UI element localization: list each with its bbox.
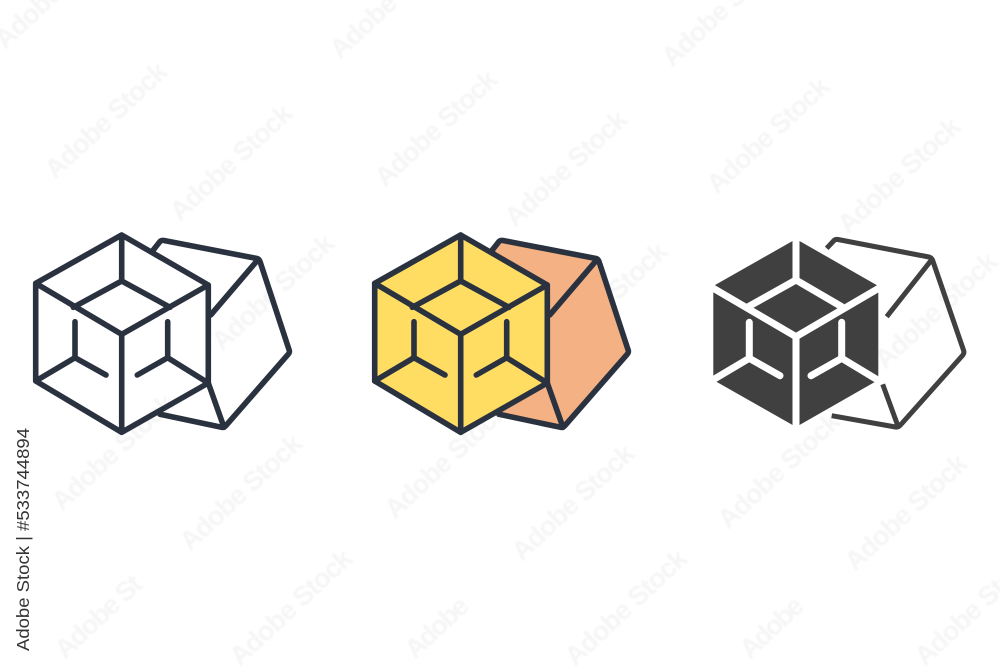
- back polyhedron filled: [492, 240, 628, 427]
- watermark pattern: Adobe Stock: [869, 245, 1000, 374]
- watermark pattern: Adobe Stock: [839, 447, 974, 576]
- watermark pattern: Adobe Stock: [174, 427, 309, 556]
- icon: solid cube: [706, 230, 964, 436]
- icon: coloured cube: [375, 235, 628, 432]
- watermark pattern: Adobe Stock: [506, 437, 641, 566]
- solid hexagon body: [713, 239, 878, 427]
- watermark pattern: Adobe Stock: [369, 63, 504, 192]
- watermark pattern: Adobe: [734, 591, 810, 664]
- watermark pattern: Adobe Stock: [379, 395, 514, 524]
- front cube filled: [375, 235, 547, 432]
- watermark pattern: Adobe Stock: [164, 97, 299, 226]
- watermark pattern: Adobe Stock: [499, 103, 634, 232]
- watermark pattern: Adobe Stock: [206, 227, 341, 356]
- watermark pattern: Adobe St: [49, 569, 148, 664]
- stock id caption: Adobe Stock | #533744894: [13, 428, 33, 651]
- watermark pattern: Adobe Stock: [39, 55, 174, 184]
- watermark pattern: Adobe Stock: [712, 405, 847, 534]
- cut-out lines: [706, 230, 886, 436]
- watermark pattern: Adobe Stock: [701, 70, 836, 199]
- watermark pattern: Adobe Stock: [832, 110, 967, 239]
- back polyhedron outline: [153, 240, 289, 427]
- watermark pattern: Adobe: [399, 591, 475, 664]
- icon: outline cube: [36, 235, 289, 432]
- front cube: [36, 235, 208, 432]
- watermark pattern: Adobe Stock: [46, 387, 181, 516]
- back polyhedron outline: [827, 239, 964, 427]
- watermark pattern: Adobe Stock: [539, 235, 674, 364]
